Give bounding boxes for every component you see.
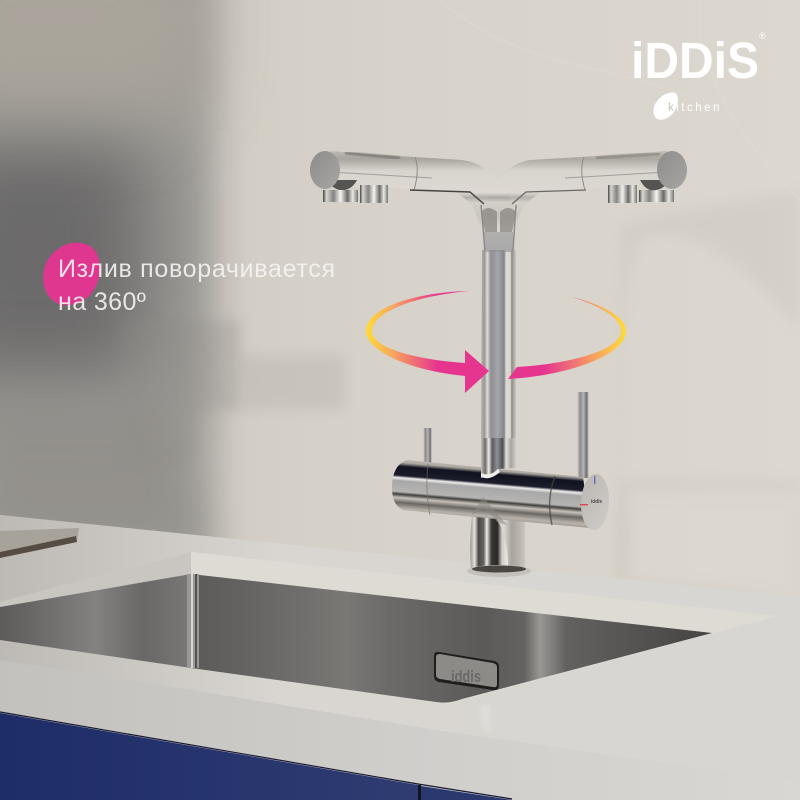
sink [0, 552, 778, 704]
right pull-out spray heads [608, 180, 674, 203]
wall background [0, 0, 344, 539]
body cap with markings [580, 473, 610, 531]
pink blob behind caption [43, 243, 100, 305]
right tall handle [577, 392, 589, 478]
cone joining leg and body [472, 497, 507, 525]
kitchen label: kitchen [668, 102, 722, 114]
faucet horizontal body [392, 460, 590, 528]
vertical stem [481, 250, 516, 478]
kitchen blob [653, 92, 678, 120]
sink back wall [191, 574, 712, 703]
caption: Излив поворачивается [58, 255, 335, 283]
spout joint [481, 205, 516, 252]
drain logo plate: iddis [451, 667, 481, 686]
front stone edge [0, 660, 800, 800]
countertop [0, 515, 800, 800]
body cap with markings: iddis [591, 499, 602, 505]
faucet [310, 151, 687, 577]
registered mark: ® [759, 31, 766, 41]
faucet leg [467, 497, 531, 577]
sink stone rim [0, 552, 778, 704]
right swivel spout [481, 151, 687, 250]
left swivel spout [310, 151, 516, 250]
logo wordmark: iDDiS [631, 32, 759, 89]
sink left wall [0, 574, 191, 668]
left arc with arrowhead [366, 291, 489, 393]
rotation arrow [366, 291, 626, 393]
cutting board on countertop [0, 528, 79, 558]
drain logo plate [434, 652, 499, 690]
right arc [508, 297, 626, 379]
left pull-out spray heads [323, 180, 388, 203]
logo [631, 31, 766, 120]
blue cabinet fronts [0, 712, 512, 800]
caption: на 360º [58, 288, 146, 316]
left short handle [423, 428, 432, 464]
caption [58, 255, 335, 316]
